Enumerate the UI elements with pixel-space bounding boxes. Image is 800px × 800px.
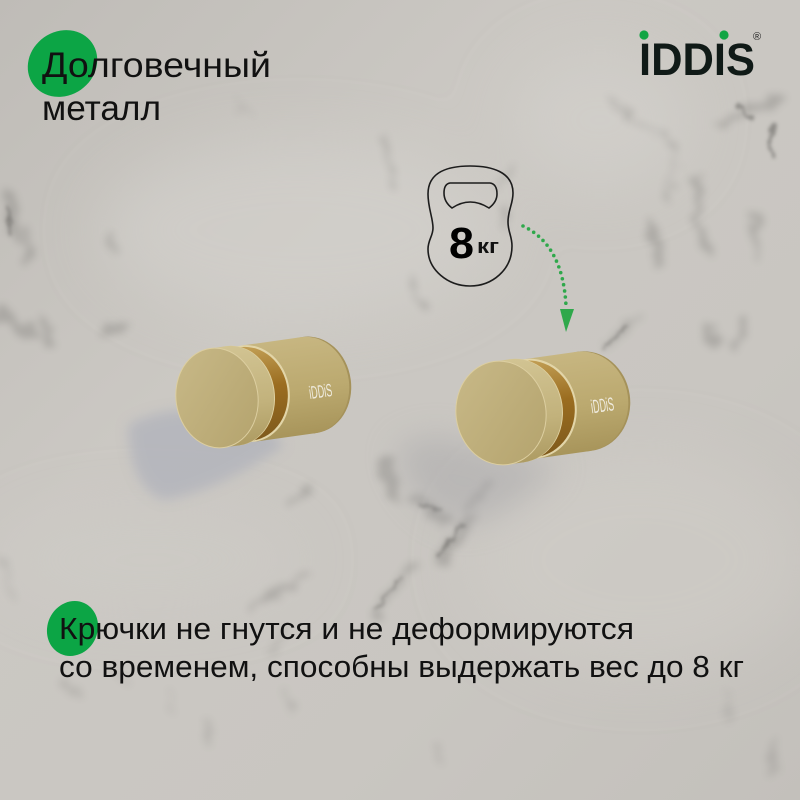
heading: Долговечный xyxy=(42,46,271,85)
icon: kettlebell 8 kg xyxy=(428,166,513,286)
body text: со временем, способны выдержать вес до 8 кг xyxy=(59,649,744,684)
logo on left hook: iDDiS xyxy=(308,380,333,403)
arrow: dotted green xyxy=(523,226,574,332)
heading: металл xyxy=(42,89,161,128)
registered mark: ® xyxy=(753,31,761,43)
knob: left hook xyxy=(169,330,358,453)
logo on right hook: iDDiS xyxy=(590,394,615,418)
collar xyxy=(185,340,281,451)
heading accent blob xyxy=(15,17,110,110)
groove xyxy=(478,355,581,463)
collar xyxy=(465,353,570,469)
hook body xyxy=(201,331,357,447)
body text: Крючки не гнутся и не деформируются xyxy=(59,611,634,646)
logo: IDDIS xyxy=(639,30,761,85)
hook face xyxy=(169,343,265,453)
body text accent blob xyxy=(38,593,107,664)
weight number: 8 xyxy=(449,219,474,268)
groove xyxy=(200,342,294,446)
weight unit: кг xyxy=(477,236,499,258)
hook body xyxy=(480,345,637,464)
hook face xyxy=(449,355,553,471)
knob: right hook xyxy=(449,343,637,471)
logo letters: IDDIS xyxy=(639,34,755,85)
